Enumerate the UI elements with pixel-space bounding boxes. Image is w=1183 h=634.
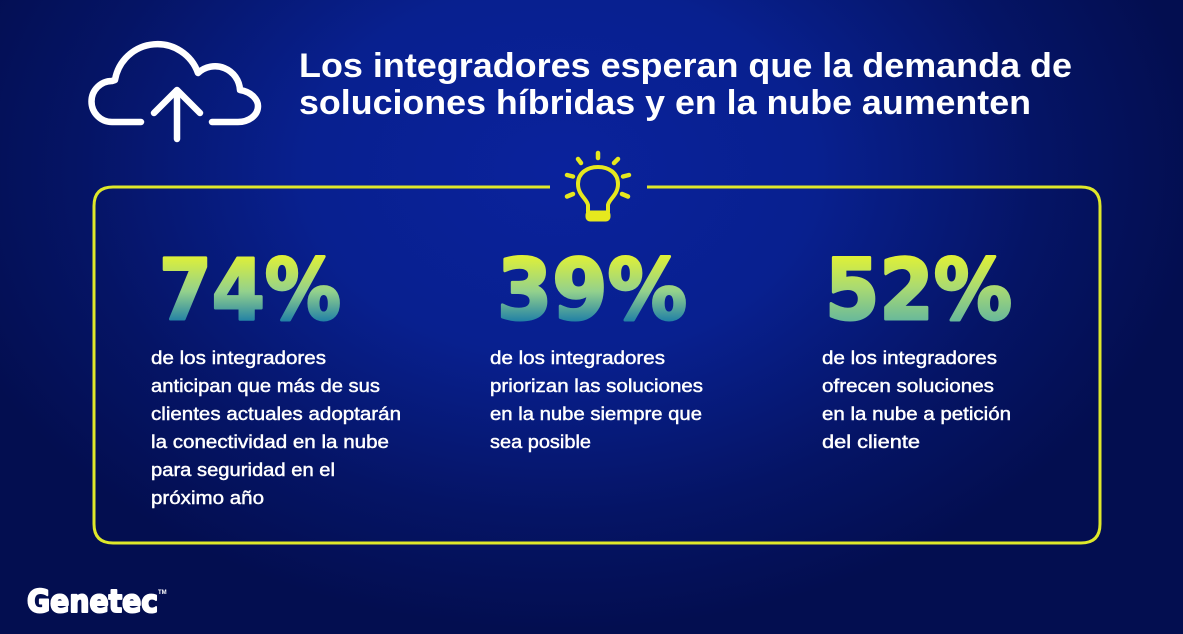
text: 74% description: próximo año	[151, 488, 264, 508]
text: 52% description: del cliente	[822, 432, 920, 452]
text: 52% description: en la nube a petición	[822, 404, 1011, 424]
title	[299, 47, 1072, 122]
title: Los integradores esperan que la demanda de	[299, 47, 1072, 85]
text: 74% description: de los integradores	[151, 348, 326, 368]
number 39%: 39%	[497, 241, 687, 339]
text: 39% description: en la nube siempre que	[490, 404, 702, 424]
text: 74% description: la conectividad en la nube	[151, 432, 389, 452]
stat: 52%	[822, 241, 1012, 452]
number 74%: 74%	[159, 241, 341, 339]
icon: light bulb	[567, 153, 629, 220]
text: 39% description: sea posible	[490, 432, 591, 452]
title: soluciones híbridas y en la nube aumenten	[299, 84, 1031, 122]
icon: cloud upload	[92, 44, 258, 139]
stat: 39%	[490, 241, 703, 452]
logo: Genetec: TM	[158, 590, 167, 596]
stat: 74%	[151, 241, 401, 508]
text: 74% description: anticipan que más de sus	[151, 376, 380, 396]
text: 74% description: clientes actuales adoptarán	[151, 404, 401, 424]
number 52%: 52%	[825, 241, 1012, 339]
text: 39% description	[490, 348, 703, 452]
text: 74% description: para seguridad en el	[151, 460, 335, 480]
text: 52% description: de los integradores	[822, 348, 997, 368]
logo: Genetec: Genetec	[27, 584, 158, 620]
text: 52% description: ofrecen soluciones	[822, 376, 994, 396]
text: 74% description	[151, 348, 401, 508]
text: 52% description	[822, 348, 1011, 452]
text: 39% description: de los integradores	[490, 348, 665, 368]
panel: rounded yellow frame	[94, 187, 1100, 543]
text: 39% description: priorizan las soluciones	[490, 376, 703, 396]
